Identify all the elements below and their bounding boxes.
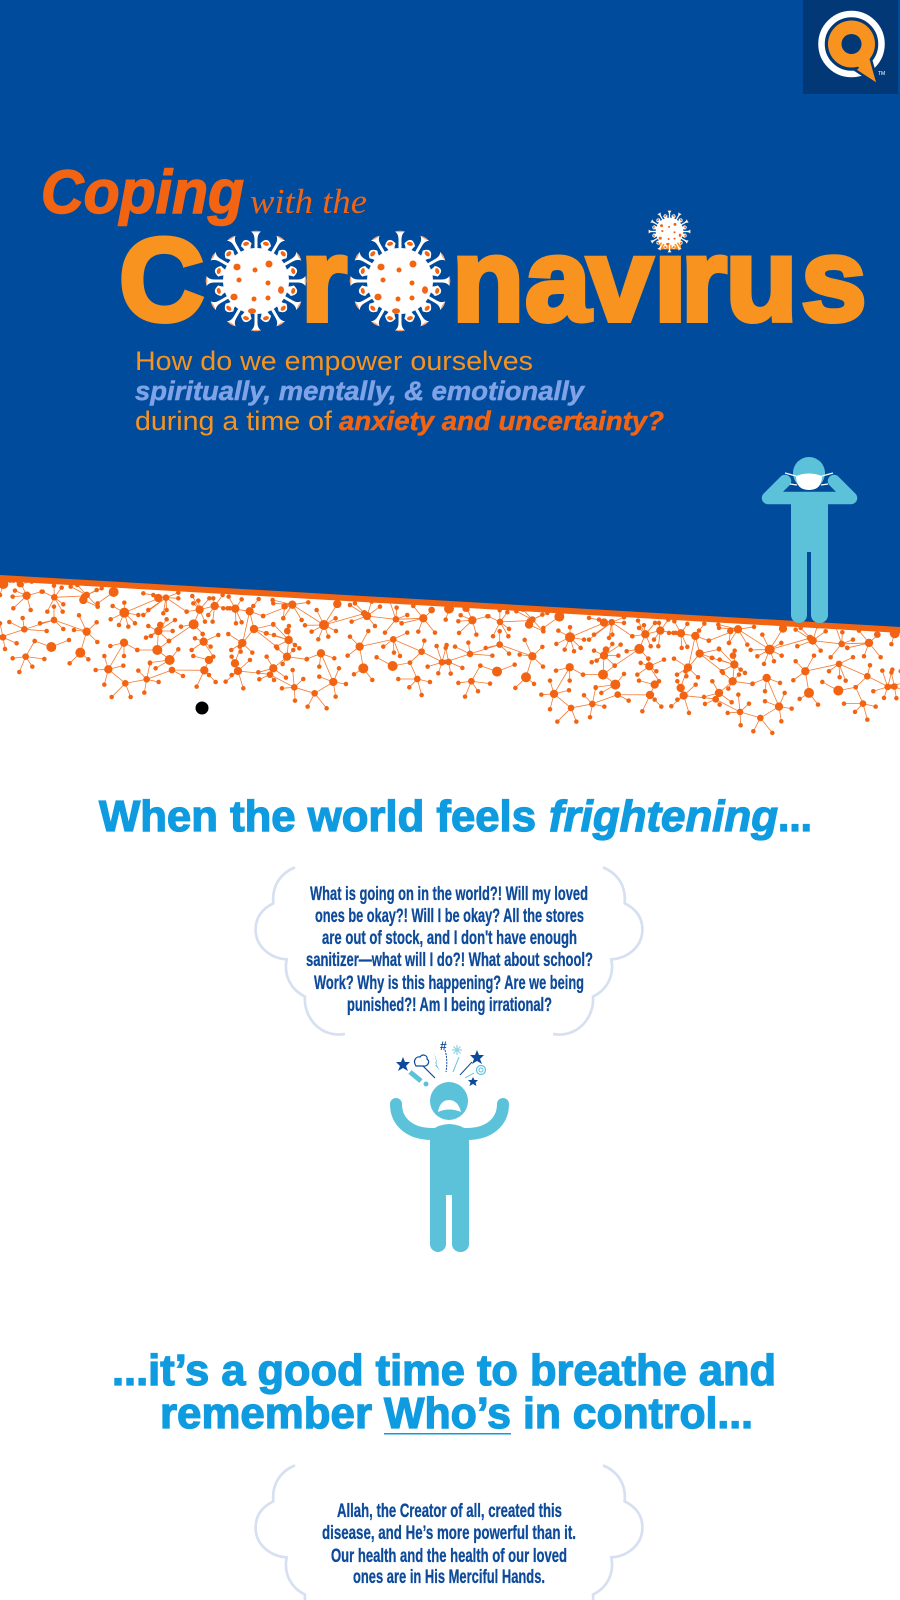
logo [803, 0, 898, 94]
subtitle: How do we empower ourselves [135, 346, 533, 376]
thought cloud: worries: are out of stock, and I don't have enough [322, 927, 577, 949]
thought cloud: worries: ones be okay?! Will I be okay? All the stores [315, 905, 584, 927]
thought cloud: worries: punished?! Am I being irrational? [347, 994, 552, 1016]
subtitle: spiritually, mentally, & emotionally [135, 376, 585, 406]
icon: small virus dot of i [648, 210, 691, 253]
heading: frightening: When the world feels [99, 792, 536, 841]
title: Coping with the: Coping [41, 158, 244, 226]
heading: breathe: ...it’s a good time to breathe and [112, 1346, 776, 1395]
subtitle [135, 346, 664, 436]
heading: frightening: ... [778, 792, 812, 841]
thought cloud: reminder: Allah, the Creator of all, created this [337, 1500, 562, 1522]
logo: TM [878, 71, 885, 77]
heading: frightening [99, 792, 812, 841]
subtitle: during a time of [135, 406, 333, 436]
thought cloud: reminder: Our health and the health of our loved [331, 1545, 567, 1567]
icons: stress symbols [396, 1039, 486, 1086]
network pattern [0, 581, 900, 758]
title: Coronavirus: r [301, 214, 347, 346]
heading: frightening: frightening [549, 792, 778, 841]
title: Coronavirus: C [119, 214, 204, 346]
subtitle: anxiety and uncertainty? [339, 406, 664, 436]
heading: remember Who's in control [160, 1389, 753, 1438]
title: Coping with the: with the [250, 182, 367, 221]
heading: remember Who's in control: Who’s [384, 1389, 511, 1438]
thought cloud: worries [256, 867, 642, 1035]
icon: virus letter o [206, 231, 306, 331]
icons: stress symbols: # [440, 1039, 447, 1053]
figure putting on mask [768, 457, 851, 623]
figure: distressed person [396, 1082, 503, 1252]
black dot [196, 702, 208, 714]
orange slanted band [0, 575, 900, 633]
heading: remember Who's in control: remember [160, 1389, 372, 1438]
thought cloud: reminder: ones are in His Merciful Hands. [353, 1566, 545, 1588]
thought cloud: worries: Work? Why is this happening? Are we being [314, 972, 584, 994]
heading: remember Who's in control: in control... [523, 1389, 753, 1438]
title: Coronavirus [119, 210, 867, 346]
title: Coronavirus: navirus [452, 214, 867, 346]
panel: blue header background [0, 0, 900, 628]
title: Coping with the [41, 158, 367, 226]
thought cloud: reminder [256, 1465, 642, 1600]
thought cloud: reminder: disease, and He’s more powerful than it. [322, 1522, 576, 1544]
thought cloud: worries: sanitizer—what will I do?! What about school? [306, 949, 593, 971]
thought cloud: worries: What is going on in the world?! Will my loved [310, 883, 588, 905]
icon: virus letter o second [350, 231, 450, 331]
